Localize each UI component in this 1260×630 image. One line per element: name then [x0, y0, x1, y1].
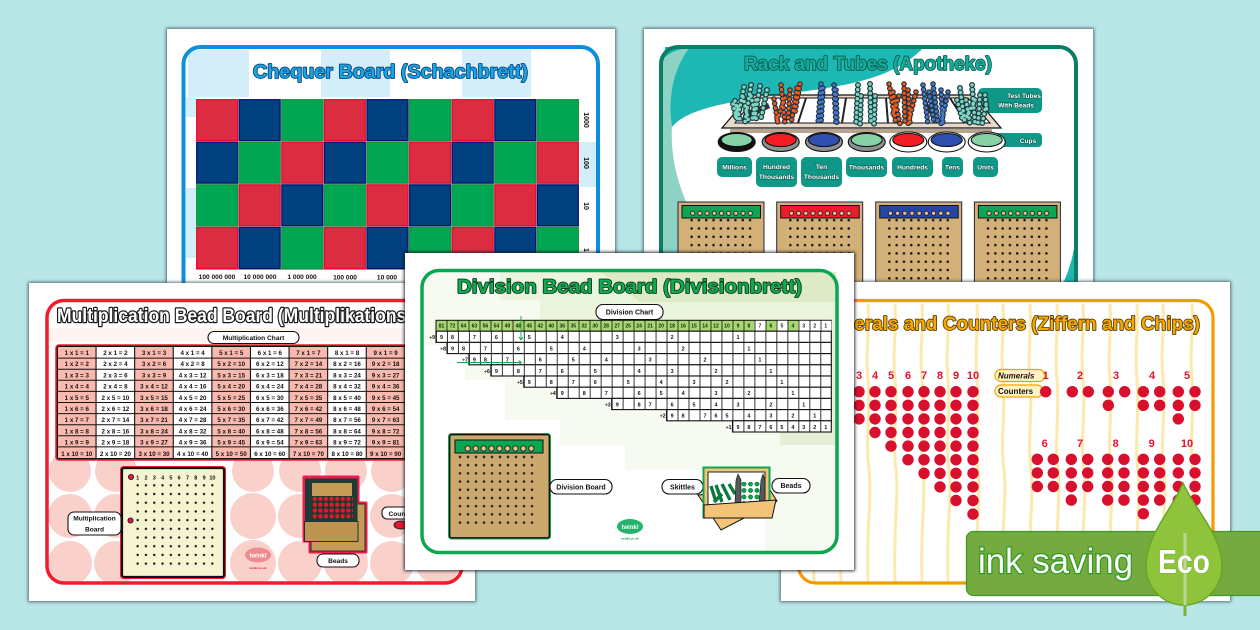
right axis labels: 10	[582, 202, 589, 210]
place value labels: Ten	[816, 164, 827, 171]
background circles	[48, 328, 462, 586]
logo: twinkl: twinkl.co.uk	[621, 536, 639, 540]
division chart: 24	[636, 324, 642, 330]
panel: division bead board sheet	[405, 253, 854, 570]
multiplication chart table	[56, 345, 418, 460]
multiplication chart table: 2 x 9 = 18	[102, 440, 130, 447]
multiplication chart table: 9 x 2 = 18	[372, 361, 400, 368]
title: Chequer Board (Schachbrett)	[253, 61, 528, 83]
multiplication chart table: 3 x 4 = 12	[140, 384, 168, 391]
division chart: 49	[505, 324, 510, 330]
division chart: 4	[792, 324, 795, 330]
multiplication chart table: 3 x 3 = 9	[142, 372, 167, 379]
counters: second set bottom row	[1037, 459, 1195, 514]
multiplication chart table: 2 x 10 = 20	[100, 451, 132, 458]
label: counters: Counters	[389, 511, 418, 518]
division chart: 18	[669, 324, 675, 330]
multiplication chart table: 1 x 7 = 7	[65, 417, 89, 424]
multiplication chart table: 6 x 9 = 54	[256, 440, 284, 447]
numerals: second set bottom row	[1042, 438, 1193, 450]
chequer grid	[196, 99, 579, 270]
multiplication chart table: 8 x 7 = 56	[333, 417, 361, 424]
arrow: horizontal green	[457, 360, 522, 364]
panel: rack and tubes sheet	[644, 29, 1093, 289]
numerals: second set bottom row: 10	[1181, 438, 1193, 450]
label: division board: Division Board	[556, 484, 606, 492]
multiplication bead board: 3	[153, 476, 156, 482]
logo: twinkl	[245, 548, 271, 570]
numerals: second set bottom row: 6	[1042, 438, 1048, 450]
multiplication chart table: 6 x 3 = 18	[256, 372, 284, 379]
multiplication chart table: 9 x 6 = 54	[372, 406, 400, 413]
division chart: 987654321	[473, 358, 761, 364]
multiplication chart table: 1 x 2 = 2	[65, 361, 89, 368]
test tubes with beads	[733, 84, 987, 124]
numerals: first set: 2	[840, 370, 846, 382]
multiplication chart table: 4 x 9 = 36	[179, 440, 207, 447]
multiplication chart table: 8 x 9 = 72	[333, 440, 361, 447]
division chart: 32	[581, 324, 587, 330]
division chart: 56	[483, 324, 488, 330]
multiplication bead board: 1	[136, 476, 139, 482]
multiplication chart table: 8 x 2 = 16	[333, 361, 361, 368]
multiplication chart table: 3 x 10 = 30	[138, 451, 170, 458]
multiplication chart table: 5 x 10 = 50	[216, 451, 247, 458]
division chart: 25	[625, 324, 631, 330]
label: beads	[317, 554, 359, 567]
division chart: 10	[724, 324, 730, 330]
logo: twinkl: twinkl	[621, 525, 639, 531]
multiplication bead board: 5	[169, 476, 172, 482]
place value labels	[717, 157, 998, 187]
bottom axis labels: 1 000 000	[287, 274, 317, 281]
place value labels: Units	[977, 164, 994, 172]
numerals: first set: 6	[905, 370, 911, 382]
label: numerals: Numerals	[998, 372, 1035, 380]
multiplication chart table: 9 x 9 = 81	[372, 440, 400, 447]
multiplication chart table: 3 x 2 = 6	[142, 361, 167, 368]
multiplication chart table: 6 x 10 = 60	[254, 451, 286, 458]
multiplication bead board: 9	[203, 476, 206, 482]
label: counters	[995, 385, 1043, 397]
label: cups: Cups	[1020, 138, 1037, 145]
multiplication chart table: 6 x 8 = 48	[256, 428, 284, 435]
numerals: second set top row	[1043, 370, 1190, 382]
numerals: second set top row: 1	[1043, 370, 1049, 382]
division chart: 81	[439, 324, 444, 330]
multiplication chart table: 9 x 4 = 36	[372, 384, 400, 391]
numerals: second set bottom row: 9	[1149, 438, 1155, 450]
multiplication chart table: 3 x 1 = 3	[142, 350, 167, 357]
multiplication bead board: 8	[194, 476, 197, 482]
division chart: ÷4	[550, 391, 556, 397]
label: counters	[382, 507, 432, 529]
numerals: first set: 4	[872, 370, 879, 382]
multiplication chart table: 5 x 7 = 35	[217, 417, 246, 424]
logo: twinkl	[617, 519, 643, 540]
numerals: second set bottom row: 7	[1077, 438, 1083, 450]
division chart: ÷5	[517, 380, 523, 386]
division chart: 1	[824, 324, 827, 330]
division chart: 28	[603, 324, 609, 330]
label: multiplication board: Board	[85, 526, 104, 534]
division chart: ÷8	[440, 346, 446, 352]
board border	[798, 300, 1213, 583]
title: Division Bead Board (Divisionbrett)	[457, 276, 802, 298]
bottom axis labels: 100 000 000	[199, 274, 236, 281]
label: counters: Counters	[998, 387, 1034, 396]
bead boards row	[678, 202, 1060, 302]
multiplication chart table: 2 x 5 = 10	[102, 395, 130, 402]
multiplication bead board	[120, 466, 226, 578]
multiplication chart table: 6 x 7 = 42	[256, 417, 284, 424]
multiplication chart table: 9 x 1 = 9	[373, 350, 398, 357]
division bead board	[448, 434, 550, 539]
label: beads	[772, 478, 810, 493]
background swoosh	[662, 47, 1076, 290]
division chart: 7	[759, 324, 762, 330]
place value labels: Thousands	[804, 174, 839, 181]
numerals: second set top row: 3	[1113, 370, 1119, 382]
multiplication chart table: 1 x 1 = 1	[65, 350, 89, 357]
multiplication chart table: 8 x 1 = 8	[335, 350, 360, 357]
multiplication chart table: 8 x 8 = 64	[333, 428, 361, 435]
bottom axis labels: 100 000	[333, 274, 357, 282]
banner	[966, 532, 1260, 596]
division chart: 6	[770, 324, 773, 330]
multiplication chart label	[208, 332, 299, 344]
multiplication chart table: 8 x 10 = 80	[331, 451, 363, 458]
panel: numerals and counters sheet	[781, 282, 1230, 601]
eco text: Eco	[1158, 543, 1210, 580]
division chart: 987654321	[561, 391, 794, 397]
multiplication chart table: 2 x 4 = 8	[103, 384, 128, 391]
division chart: 2	[813, 324, 816, 330]
counters: first set	[827, 392, 973, 514]
multiplication chart table: 7 x 6 = 42	[295, 406, 323, 413]
division chart: 3	[802, 324, 805, 330]
multiplication chart table: 6 x 4 = 24	[256, 384, 284, 391]
division chart: 21	[647, 324, 653, 330]
label: multiplication board: Multiplication	[73, 516, 116, 522]
division chart: 63	[472, 324, 477, 330]
division chart: 5	[781, 324, 784, 330]
multiplication chart table: 5 x 5 = 25	[217, 395, 246, 402]
panel: chequer board sheet	[167, 29, 615, 289]
multiplication chart table: 7 x 2 = 14	[295, 361, 323, 368]
division chart: 64	[461, 324, 466, 330]
multiplication chart table: 9 x 5 = 45	[372, 395, 400, 402]
multiplication chart table: 7 x 3 = 21	[295, 372, 323, 379]
label: beads: Beads	[780, 483, 802, 490]
label: multiplication board	[68, 512, 121, 535]
multiplication chart table: 8 x 6 = 48	[333, 406, 361, 413]
division chart: 40	[549, 324, 554, 330]
counters: second set top row	[1046, 392, 1195, 419]
numerals: second set top row: 5	[1184, 370, 1190, 382]
numerals: first set	[824, 370, 979, 382]
multiplication chart table: 8 x 5 = 40	[333, 395, 361, 402]
multiplication bead board: 6	[178, 476, 181, 482]
ink saving text: ink saving	[978, 542, 1133, 581]
division chart: 27	[614, 324, 620, 330]
board border	[47, 300, 462, 583]
label: test tubes with beads: Test Tubes	[1007, 93, 1041, 100]
division chart label: Division Chart	[606, 310, 654, 316]
multiplication chart table: 1 x 3 = 3	[65, 372, 89, 379]
division chart	[429, 320, 831, 432]
division chart: 72	[450, 324, 455, 330]
division chart: 9	[737, 324, 740, 330]
multiplication chart table: 3 x 9 = 27	[140, 440, 168, 447]
numerals: first set: 9	[953, 370, 959, 382]
multiplication chart table: 2 x 2 = 4	[103, 361, 128, 368]
multiplication chart table: 7 x 4 = 28	[295, 384, 323, 391]
label: skittles	[662, 480, 703, 494]
division chart: 12	[713, 324, 719, 330]
bottom axis labels: 10 000	[377, 274, 397, 282]
board border	[661, 47, 1076, 307]
numerals: first set: 3	[856, 370, 862, 382]
bottom axis labels: 10 000 000	[243, 274, 277, 281]
division chart: ÷9	[429, 335, 435, 341]
numerals: second set top row: 2	[1077, 370, 1083, 382]
multiplication chart table: 4 x 6 = 24	[179, 406, 207, 413]
division chart: 987654321	[736, 425, 827, 431]
place value labels: Thousands	[759, 174, 794, 181]
multiplication bead board: 2	[144, 476, 148, 482]
multiplication chart table: 4 x 5 = 20	[179, 395, 207, 402]
division chart: 987654321	[616, 402, 805, 408]
multiplication chart table: 4 x 8 = 32	[179, 428, 207, 435]
multiplication chart table: 5 x 4 = 20	[217, 384, 246, 391]
division chart: 987654321	[451, 346, 750, 352]
division chart: 45	[527, 324, 532, 330]
board border	[422, 270, 837, 552]
multiplication chart table: 4 x 2 = 8	[180, 361, 205, 368]
division chart: 48	[516, 324, 521, 330]
multiplication bead board: 4	[161, 476, 165, 482]
label: cups	[995, 133, 1042, 147]
division chart: 36	[560, 324, 565, 330]
numerals: second set bottom row: 8	[1113, 438, 1119, 450]
multiplication chart table: 6 x 2 = 12	[256, 361, 284, 368]
label: test tubes with beads	[978, 88, 1042, 113]
multiplication bead board: 10	[209, 476, 215, 482]
multiplication chart table: 5 x 1 = 5	[219, 350, 244, 357]
multiplication chart table: 2 x 7 = 14	[102, 417, 130, 424]
multiplication chart table: 2 x 1 = 2	[103, 350, 128, 357]
panel: multiplication bead board sheet	[29, 283, 475, 601]
place value labels: Tens	[945, 164, 960, 172]
title: Numerals and Counters (Ziffern and Chips)	[812, 313, 1200, 335]
rack	[722, 95, 1001, 133]
multiplication chart table: 5 x 6 = 30	[217, 406, 246, 413]
board border	[184, 47, 598, 307]
arrow: vertical green	[519, 316, 523, 340]
multiplication chart table: 6 x 6 = 36	[256, 406, 284, 413]
multiplication chart table: 3 x 6 = 18	[140, 406, 168, 413]
multiplication chart table: 1 x 4 = 4	[65, 384, 89, 391]
cups	[718, 132, 1005, 152]
numerals: second set top row: 4	[1149, 370, 1156, 382]
icon: box of skittles and beads	[698, 468, 777, 530]
multiplication chart table: 5 x 9 = 45	[217, 440, 246, 447]
multiplication chart table: 8 x 4 = 32	[333, 384, 361, 391]
multiplication chart table: 2 x 6 = 12	[102, 406, 130, 413]
multiplication chart table: 9 x 8 = 72	[372, 428, 400, 435]
multiplication chart table: 3 x 5 = 15	[140, 395, 168, 402]
right axis labels	[582, 112, 589, 252]
division chart: ÷2	[660, 414, 666, 420]
icon: box of red beads	[304, 477, 366, 552]
numerals: first set: 8	[937, 370, 943, 382]
multiplication chart table: 2 x 8 = 16	[102, 428, 130, 435]
label: division board	[550, 480, 612, 494]
multiplication chart label: Multiplication Chart	[223, 335, 285, 342]
multiplication chart table: 7 x 8 = 56	[295, 428, 323, 435]
multiplication chart table: 7 x 10 = 70	[293, 451, 325, 458]
division chart: 987654321	[528, 380, 783, 386]
multiplication chart table: 2 x 3 = 6	[103, 372, 128, 379]
multiplication chart table: 6 x 5 = 30	[256, 395, 284, 402]
multiplication chart table: 1 x 6 = 6	[65, 406, 89, 413]
division chart: 8	[748, 324, 751, 330]
logo: twinkl: twinkl.co.uk	[249, 566, 267, 570]
multiplication chart table: 4 x 1 = 4	[180, 350, 205, 357]
place value labels: Hundreds	[897, 164, 928, 172]
right axis labels: 100	[582, 157, 589, 169]
multiplication chart table: 9 x 10 = 90	[370, 451, 402, 458]
multiplication chart table: 4 x 4 = 16	[179, 384, 207, 391]
label: skittles: Skittles	[670, 484, 695, 492]
division chart: 54	[494, 324, 499, 330]
numerals: first set: 10	[967, 370, 979, 382]
place value labels: Hundred	[763, 164, 790, 171]
division chart label	[596, 304, 663, 320]
bottom axis labels	[199, 274, 397, 282]
multiplication chart table: 4 x 3 = 12	[179, 372, 207, 379]
division chart: 14	[702, 324, 708, 330]
label: test tubes with beads: With Beads	[998, 102, 1034, 110]
multiplication chart table: 7 x 9 = 63	[295, 440, 323, 447]
logo: twinkl: twinkl	[249, 554, 267, 560]
division chart: 987654321	[440, 335, 740, 341]
icon: leaf	[1146, 483, 1222, 616]
multiplication chart table: 5 x 2 = 10	[217, 361, 246, 368]
division chart: ÷7	[462, 358, 468, 364]
multiplication chart table: 7 x 5 = 35	[295, 395, 323, 402]
division chart: 15	[691, 324, 697, 330]
multiplication chart table: 3 x 8 = 24	[140, 428, 168, 435]
division chart: 987654321	[671, 414, 816, 420]
division chart: ÷6	[484, 369, 490, 375]
multiplication chart table: 5 x 3 = 15	[217, 372, 246, 379]
division chart: ÷1	[726, 425, 732, 431]
numerals: first set: 7	[921, 370, 927, 382]
multiplication chart table: 6 x 1 = 6	[258, 350, 282, 357]
division chart: 16	[680, 324, 686, 330]
multiplication chart table: 4 x 7 = 28	[179, 417, 207, 424]
place value labels: Thousands	[849, 164, 884, 172]
numerals: first set: 1	[824, 370, 830, 382]
multiplication chart table: 9 x 3 = 27	[372, 372, 400, 379]
multiplication chart table: 4 x 10 = 40	[177, 451, 209, 458]
multiplication chart table: 7 x 1 = 7	[296, 350, 321, 357]
multiplication chart table: 9 x 7 = 63	[372, 417, 400, 424]
numerals: first set: 5	[888, 370, 894, 382]
division chart: 35	[571, 324, 576, 330]
right axis labels: 1000	[582, 112, 589, 128]
multiplication chart table: 7 x 7 = 49	[295, 417, 323, 424]
multiplication chart table: 1 x 8 = 8	[65, 428, 89, 435]
title: Rack and Tubes (Apotheke)	[744, 53, 992, 75]
multiplication bead board: 7	[186, 476, 189, 482]
division chart: 987654321	[495, 369, 772, 375]
multiplication chart table: 5 x 8 = 40	[217, 428, 246, 435]
place value labels: Millions	[722, 164, 747, 172]
division chart: 30	[592, 324, 598, 330]
multiplication chart table: 8 x 3 = 24	[333, 372, 361, 379]
multiplication chart table: 1 x 9 = 9	[65, 440, 89, 447]
multiplication chart table: 1 x 10 = 10	[61, 451, 93, 458]
division chart: ÷3	[605, 402, 611, 408]
label: beads: Beads	[328, 558, 348, 565]
multiplication chart table: 3 x 7 = 21	[140, 417, 168, 424]
division chart: 42	[538, 324, 543, 330]
right axis labels: 1	[582, 248, 589, 252]
label: numerals	[995, 370, 1045, 382]
multiplication chart table: 1 x 5 = 5	[65, 395, 89, 402]
division chart: 20	[658, 324, 664, 330]
